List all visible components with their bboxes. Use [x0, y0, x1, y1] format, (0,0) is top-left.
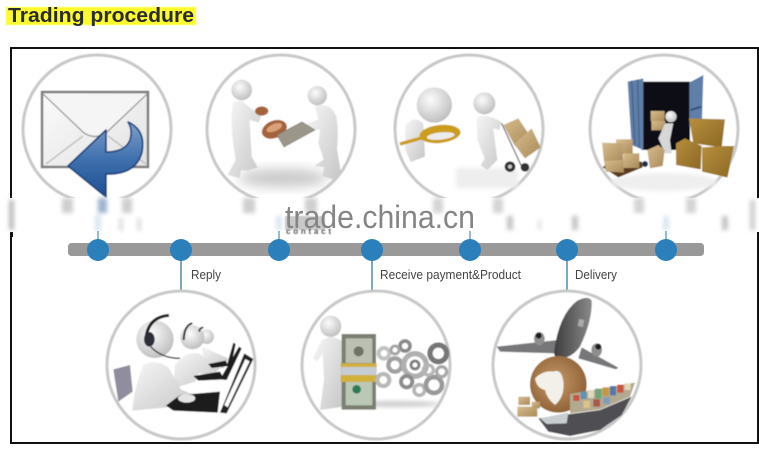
- panel: payment and gears: [302, 291, 450, 439]
- blurred band: [0, 198, 759, 232]
- label: receive payment and product: Receive payment&Product: [380, 268, 521, 282]
- icon: parcels: [517, 397, 540, 417]
- icon: back operators: [173, 323, 228, 388]
- icon: left figure: [228, 80, 261, 178]
- icon: front operator: [132, 315, 196, 411]
- icon: gears: [377, 341, 447, 395]
- icon: container ship: [538, 383, 635, 436]
- icon: right figure: [306, 86, 341, 180]
- keyboard hand: [178, 394, 195, 403]
- icon: contract document: [277, 122, 315, 147]
- watermark: trade.china.cn: [285, 199, 475, 235]
- icon: figure: [313, 316, 344, 410]
- panel: contract stamp figures: [207, 55, 355, 203]
- panel: container loading: [590, 55, 738, 203]
- timeline bar: [68, 243, 704, 256]
- icon: back laptops: [193, 343, 242, 381]
- icon: globe: [530, 356, 587, 413]
- icon: chair: [113, 365, 133, 402]
- icon: cardboard boxes on pallet: [602, 139, 643, 177]
- blurred smudges: [9, 198, 755, 231]
- panel: delivery air and sea: [493, 291, 641, 439]
- icon: worker with boxes: [642, 111, 677, 168]
- connector stubs: [98, 231, 666, 242]
- timeline dots: [87, 239, 677, 261]
- blurred label: contact: [286, 227, 331, 236]
- panel: enquiry mail icon: [23, 55, 171, 203]
- title: Trading procedure: [8, 5, 194, 27]
- icon: stamp: [255, 106, 290, 142]
- icon: dollar stacks: [341, 334, 377, 410]
- icon: figure with magnifier: [400, 87, 461, 162]
- label: reply: Reply: [191, 268, 222, 282]
- icon: figure with hand truck: [473, 92, 541, 172]
- icon: envelope: [42, 92, 148, 167]
- icon: front laptop: [166, 353, 253, 413]
- panel: inspection and cart figures: [395, 55, 543, 203]
- icon: reply arrow: [68, 122, 143, 197]
- icon: shipping container: [628, 75, 703, 150]
- connectors to lower circles: [181, 256, 567, 292]
- icon: airplane: [497, 298, 618, 369]
- icon: wooden crates: [676, 118, 734, 177]
- panel: call center: [107, 291, 255, 439]
- label: delivery: Delivery: [575, 268, 618, 282]
